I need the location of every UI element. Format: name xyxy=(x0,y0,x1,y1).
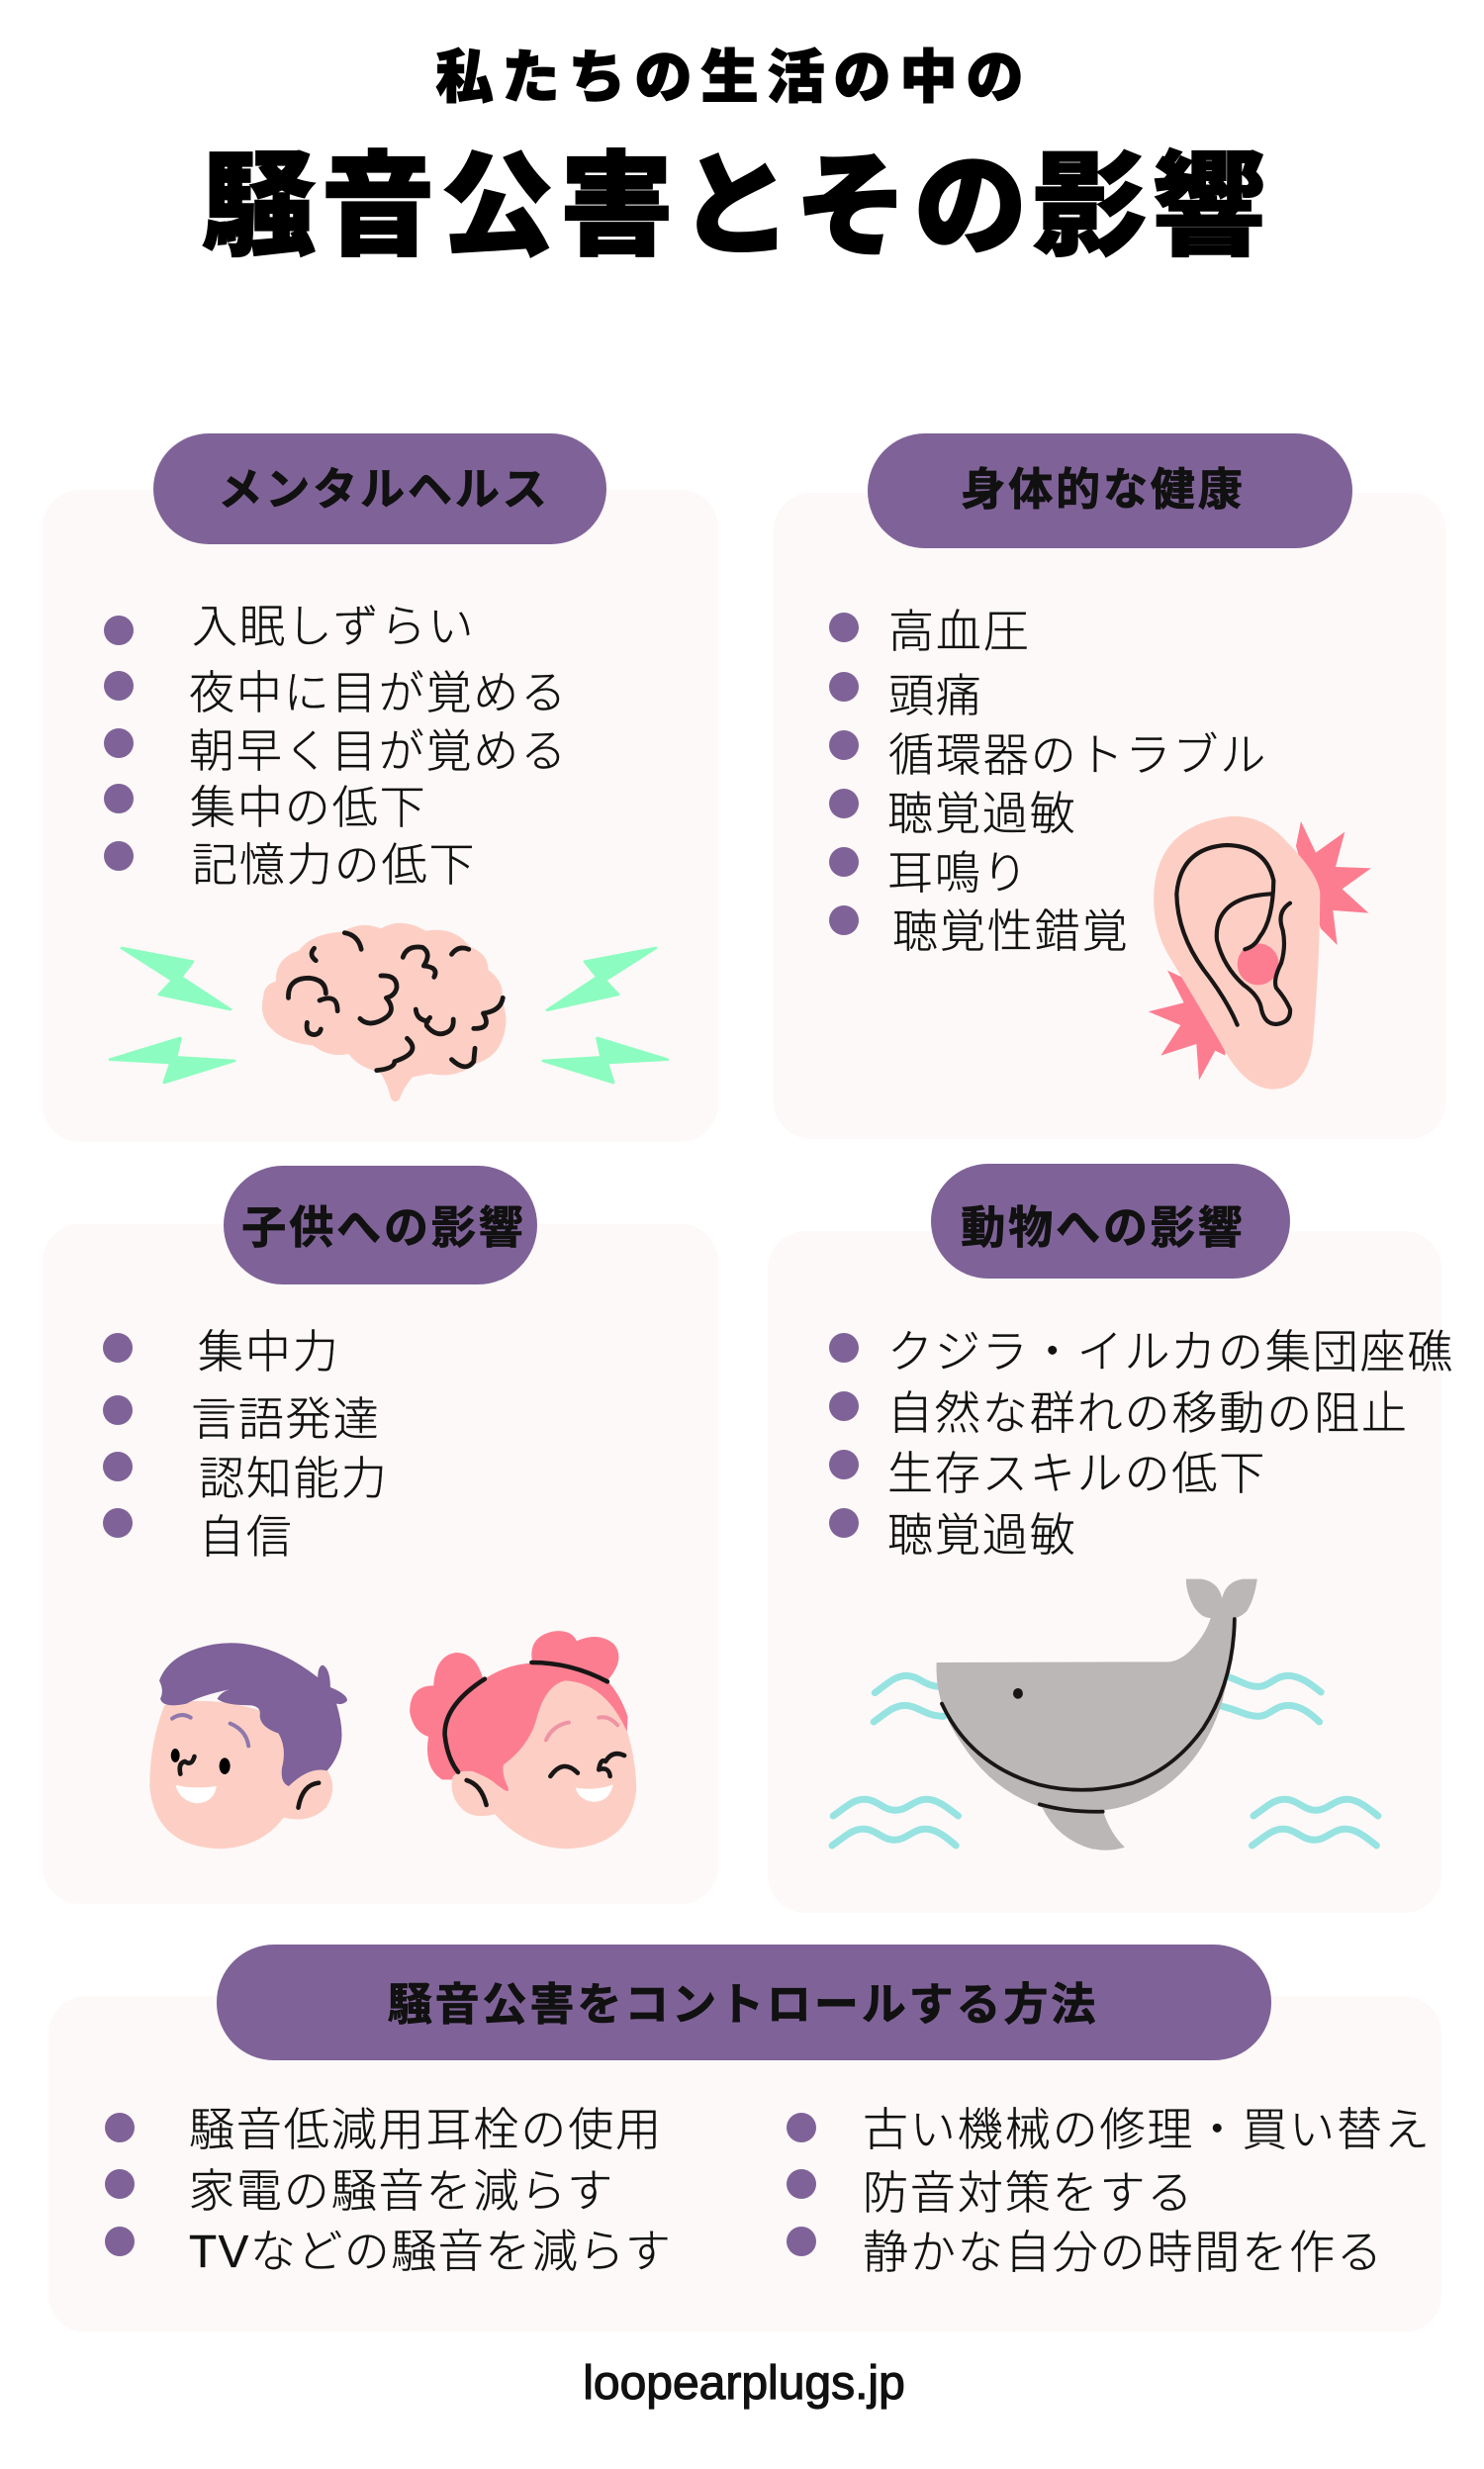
panel background xyxy=(43,490,718,1142)
title line 2: 騒音公害とその影響 xyxy=(202,115,1272,278)
lightning bolts xyxy=(110,948,668,1083)
heading pill xyxy=(224,1166,537,1284)
bullet list: 聴覚過敏 xyxy=(887,778,1077,843)
bullet list right: 防音対策をする xyxy=(863,2157,1194,2223)
bullet list: 集中力 xyxy=(198,1316,340,1381)
bullet list: 自然な群れの移動の阻止 xyxy=(887,1377,1409,1443)
bullet list left: 騒音低減用耳栓の使用 xyxy=(189,2094,663,2159)
icon: brain with lightning bolts xyxy=(110,923,668,1101)
bullet list: 耳鳴り xyxy=(887,837,1030,902)
ear shape xyxy=(1154,816,1320,1090)
panel: noise control xyxy=(48,1945,1441,2332)
title line 1: 私たちの生活の中の xyxy=(435,31,1033,114)
brain shape xyxy=(262,923,506,1101)
heading pill xyxy=(868,433,1352,548)
boy face xyxy=(149,1643,347,1849)
bullet list right: 静かな自分の時間を作る xyxy=(863,2217,1384,2282)
panel: children xyxy=(43,1166,718,1904)
bullet list: 高血圧 xyxy=(888,596,1031,661)
girl face xyxy=(410,1631,636,1849)
panel background xyxy=(774,493,1446,1139)
panel background xyxy=(48,1996,1441,2332)
bullet list: 頭痛 xyxy=(888,660,983,725)
icon: ear with pain bursts xyxy=(1149,816,1371,1090)
panel: animals xyxy=(768,1164,1454,1913)
heading pill: 騒音公害をコントロールする方法 xyxy=(388,1968,1098,2033)
bullet list: 入眠しずらい xyxy=(192,591,475,656)
bullet list xyxy=(829,1316,1454,1565)
bullet list: 集中の低下 xyxy=(190,772,427,837)
heading pill xyxy=(153,433,606,544)
icon: children faces xyxy=(149,1631,636,1849)
heading pill: メンタルヘルス xyxy=(218,453,550,518)
pain bursts xyxy=(1149,821,1371,1081)
bullet list: 自信 xyxy=(199,1501,294,1567)
bullet list: 生存スキルの低下 xyxy=(887,1438,1266,1503)
brain folds xyxy=(288,933,503,1071)
bullet list right: 古い機械の修理・買い替え xyxy=(863,2094,1432,2159)
panel background xyxy=(43,1224,718,1904)
bullet list left: TVなどの騒音を減らす xyxy=(189,2226,672,2277)
bullet list: 聴覚過敏 xyxy=(887,1499,1077,1565)
ear lines xyxy=(1176,845,1290,1025)
panel: physical health xyxy=(774,433,1446,1139)
bullet list left xyxy=(105,2094,672,2277)
bullet list left: 家電の騒音を減らす xyxy=(189,2155,614,2221)
bullet list: 言語発達 xyxy=(191,1383,381,1449)
whale mouth and fin lines xyxy=(942,1619,1235,1812)
bullet list: クジラ・イルカの集団座礁 xyxy=(887,1316,1454,1381)
footer website: loopearplugs.jp xyxy=(583,2357,905,2410)
heading pill xyxy=(931,1164,1290,1279)
ear canal xyxy=(1238,943,1279,985)
bullet list right xyxy=(787,2094,1432,2282)
heading pill: 身体的な健康 xyxy=(961,453,1246,518)
bullet list xyxy=(104,591,568,895)
bullet list: 循環器のトラブル xyxy=(888,719,1267,785)
bullet list: 朝早く目が覚める xyxy=(189,715,568,781)
bullet list: 記憶力の低下 xyxy=(192,829,476,895)
bullet list: 聴覚性錯覚 xyxy=(892,896,1130,961)
title xyxy=(202,31,1272,278)
heading pill: 動物への影響 xyxy=(961,1191,1246,1256)
panel: mental health xyxy=(43,433,718,1142)
whale body xyxy=(937,1579,1257,1851)
bullet list: 夜中に目が覚める xyxy=(189,657,568,722)
heading pill xyxy=(217,1945,1271,2060)
waves xyxy=(832,1675,1378,1846)
panel background xyxy=(768,1231,1441,1913)
heading pill: 子供への影響 xyxy=(241,1191,526,1256)
bullet list: 認知能力 xyxy=(199,1443,389,1508)
bullet list xyxy=(103,1316,389,1567)
whale eye xyxy=(1013,1688,1023,1699)
icon: whale with waves xyxy=(832,1579,1378,1851)
bullet list xyxy=(829,596,1267,961)
